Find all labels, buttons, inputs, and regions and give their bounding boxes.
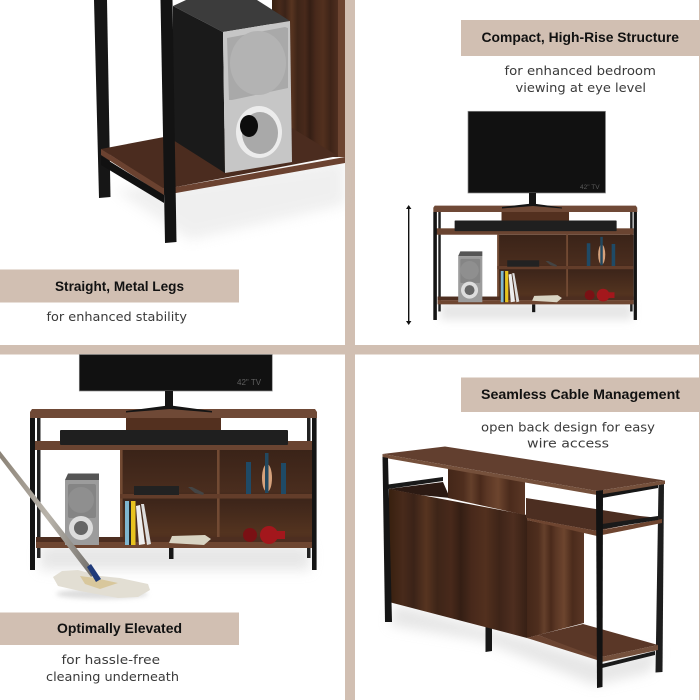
text: bedroom viewing: for enhanced bedroom <box>504 63 656 78</box>
subwoofer speaker <box>173 0 292 173</box>
heading band: straight metal legs <box>0 270 239 302</box>
text: hassle-free cleaning <box>46 652 179 684</box>
panel: compact high-rise structure <box>355 0 699 345</box>
front right leg <box>596 490 603 688</box>
text: bedroom viewing <box>504 63 656 95</box>
text: open back design <box>481 420 656 450</box>
wooden bottom shelf <box>101 122 345 195</box>
headphones <box>243 526 285 544</box>
television <box>468 111 606 208</box>
television: 42" TV <box>580 184 600 191</box>
speaker <box>65 474 99 545</box>
heading band: compact high-rise: Compact, High-Rise Structure <box>482 30 680 45</box>
bottom shelf <box>527 624 658 668</box>
tv stand front view <box>30 409 317 570</box>
back panels with grain <box>389 489 527 638</box>
upper shelf left <box>388 482 450 498</box>
front metal leg <box>160 0 176 243</box>
heading band: straight metal legs: Straight, Metal Legs <box>55 279 184 294</box>
panel: seamless cable management <box>355 354 699 700</box>
text: hassle-free cleaning: for hassle-free <box>62 652 160 667</box>
centre upper panel <box>448 466 525 515</box>
front left leg <box>382 457 392 622</box>
soundbar <box>60 430 288 445</box>
heading band: optimally elevated: Optimally Elevated <box>57 621 182 636</box>
back metal leg <box>94 0 110 198</box>
panel: optimally elevated <box>0 354 345 700</box>
text: bedroom viewing: viewing at eye level <box>516 80 646 95</box>
text: open back design: open back design for easy <box>481 420 656 434</box>
heading band: compact high-rise <box>461 20 700 56</box>
back legs <box>486 484 664 672</box>
panel: straight metal legs <box>0 0 345 345</box>
side panel <box>527 520 584 638</box>
dimension arrow <box>406 205 411 325</box>
television: 42" TV <box>237 378 262 387</box>
heading band: optimally elevated <box>0 612 239 645</box>
magazine <box>169 535 211 545</box>
media box and remote <box>134 486 204 495</box>
heading band: seamless cable management: Seamless Cable Management <box>481 387 681 402</box>
floor shadow <box>115 160 345 240</box>
angled console <box>382 446 665 688</box>
tabletop <box>382 446 665 495</box>
text: enhanced stability: for enhanced stability <box>46 309 188 324</box>
television <box>79 354 272 412</box>
books <box>125 501 151 545</box>
cubby shelves <box>34 441 312 548</box>
wooden back panel <box>272 0 345 157</box>
heading band: seamless cable management <box>461 378 700 412</box>
right middle shelf <box>526 498 662 536</box>
figurines <box>246 453 286 494</box>
text: hassle-free cleaning: cleaning underneath <box>46 669 179 684</box>
tv stand front view <box>433 206 637 320</box>
mop <box>0 451 150 599</box>
text: open back design: wire access <box>527 436 609 450</box>
shelf crossbar <box>101 156 164 203</box>
